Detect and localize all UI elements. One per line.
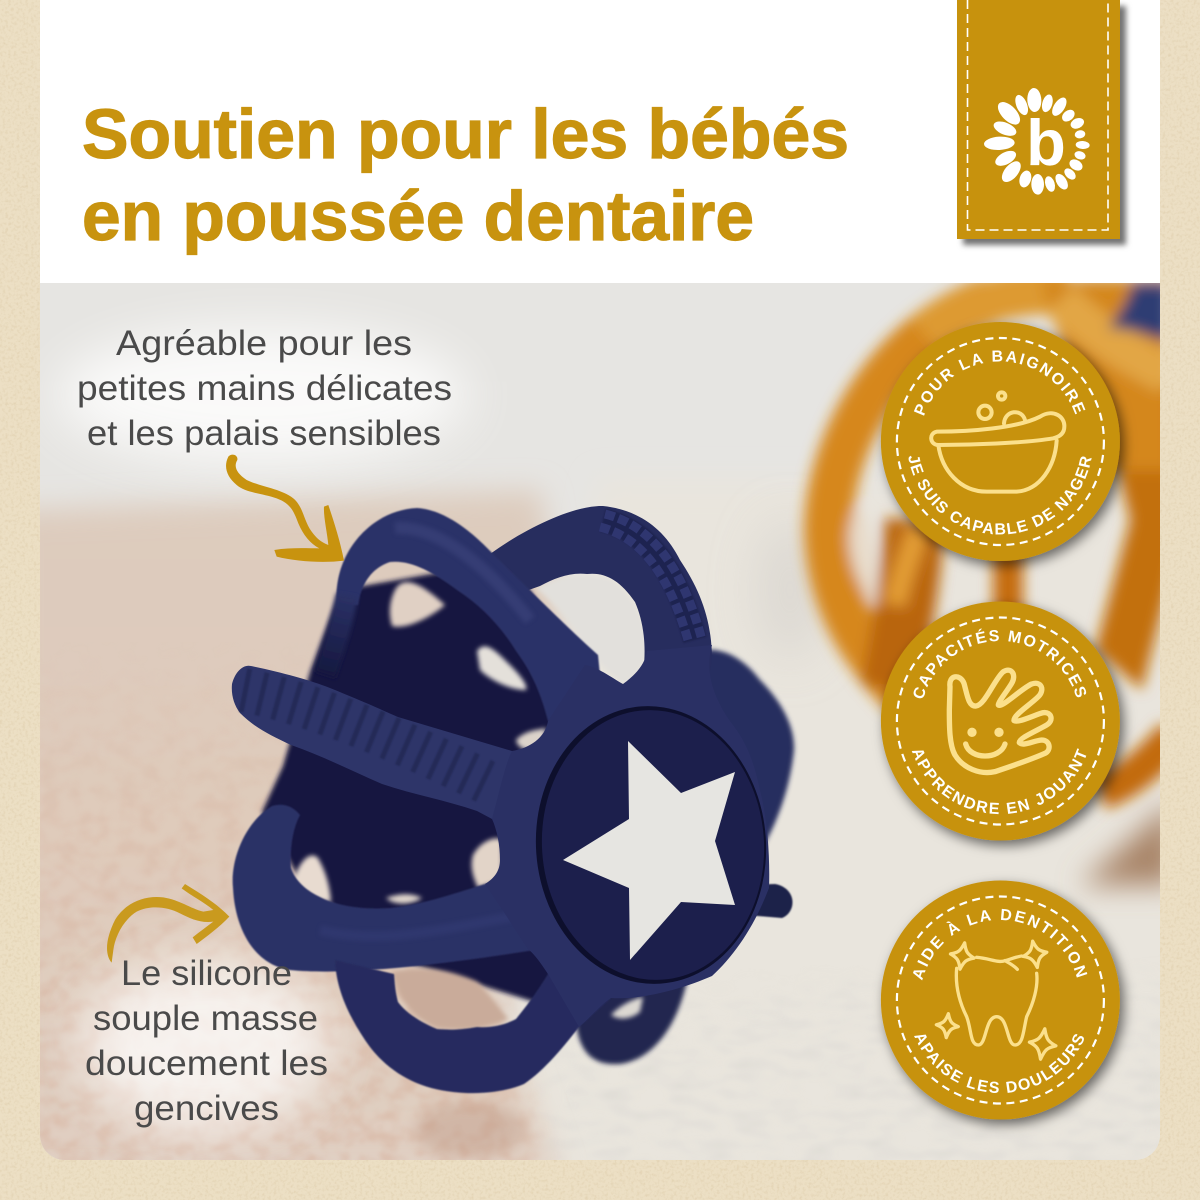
logo: sunflower (984, 88, 1090, 195)
top left arch (325, 508, 605, 725)
star (563, 741, 735, 960)
badge: teething (876, 877, 1132, 1133)
text: soft hands and palate: petites mains délicates (77, 369, 452, 408)
badge: motor skills (876, 598, 1132, 854)
text: soft hands and palate (77, 324, 452, 453)
bottom arch (335, 960, 611, 1093)
badge: motor skills: APPRENDRE EN JOUANT (912, 748, 1086, 814)
rug (40, 481, 570, 1160)
badge: bath: JE SUIS CAPABLE DE NAGER (908, 456, 1092, 534)
back arch with tread (491, 506, 712, 661)
photo backdrop (40, 283, 1200, 1200)
header panel (40, 0, 1160, 284)
text glows (57, 327, 467, 1130)
logo letter: b (1026, 106, 1066, 179)
title (82, 95, 849, 255)
arrow: bottom (107, 884, 229, 963)
text: silicone massages gums: gencives (134, 1089, 279, 1128)
lower left arch (233, 805, 545, 972)
knob (756, 883, 794, 919)
title: Soutien pour les bébés (82, 95, 849, 173)
text: silicone massages gums: souple masse (93, 999, 318, 1038)
text: silicone massages gums: doucement les (85, 1044, 328, 1083)
badge: bath: POUR LA BAIGNOIRE (914, 350, 1086, 416)
arrow: top (226, 455, 344, 562)
icon: bath tub (931, 392, 1064, 492)
navy teether (232, 506, 794, 1093)
back right lobe (710, 646, 798, 844)
text: soft hands and palate: Agréable pour les (116, 324, 412, 363)
badge: motor skills: CAPACITÉS MOTRICES (914, 628, 1086, 698)
orange teether, blurred (828, 280, 1175, 792)
openings (292, 575, 647, 1030)
title: en poussée dentaire (82, 177, 754, 255)
badge: teething: APAISE LES DOULEURS (914, 1034, 1084, 1093)
text: soft hands and palate: et les palais sensibles (87, 414, 441, 453)
logo ribbon (957, 0, 1120, 239)
badge: teething: AIDE À LA DENTITION (913, 908, 1088, 980)
back lower lobe (574, 984, 690, 1068)
dark inner body (259, 571, 549, 1004)
badge: bath (876, 318, 1132, 574)
text: silicone massages gums (85, 954, 328, 1128)
text: silicone massages gums: Le silicone (121, 954, 292, 993)
icon: smiling hand (949, 670, 1051, 773)
panel: product photo (40, 283, 1160, 1160)
ribbed arm (232, 666, 512, 819)
icon: tooth with sparkles (935, 939, 1058, 1061)
hub (485, 645, 775, 1027)
